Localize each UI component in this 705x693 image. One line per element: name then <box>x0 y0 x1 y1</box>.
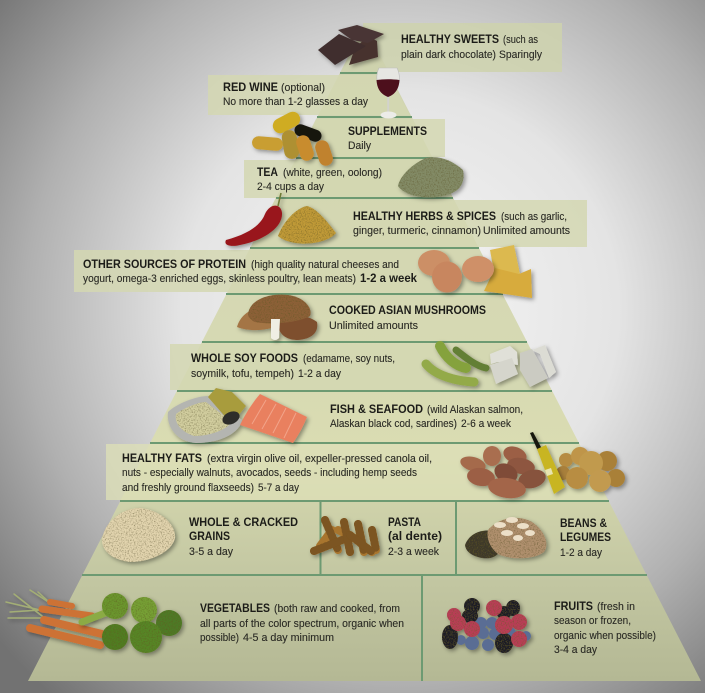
text: pasta: (al dente) <box>388 531 442 543</box>
tier: red wine <box>223 68 400 118</box>
tier: cooked asian mushrooms <box>237 295 486 340</box>
text: healthy sweets: plain dark chocolate) <box>401 49 496 61</box>
green divider lines <box>82 73 647 681</box>
icon: rice pile <box>102 508 175 562</box>
text: protein: yogurt, omega-3 enriched eggs, skinless poultry, lean meats) <box>83 273 356 285</box>
icon: broccoli <box>82 593 182 653</box>
text: tea <box>257 167 382 193</box>
icon: olive oil bottle <box>530 432 565 494</box>
text: tea: TEA <box>257 167 278 179</box>
tier: tea <box>257 157 464 197</box>
text: grains <box>189 517 298 558</box>
panel: tea <box>244 160 452 198</box>
text: vegetables: all parts of the color spectrum, organic when <box>200 618 404 630</box>
text: soy foods: 1-2 a day <box>298 368 341 380</box>
text: herbs and spices: HEALTHY HERBS & SPICES <box>353 211 496 223</box>
text: pasta <box>388 517 442 558</box>
tier: beans and legumes <box>465 517 611 559</box>
text: fruits: (fresh in <box>597 601 635 613</box>
text: healthy sweets: Sparingly <box>499 49 542 61</box>
tier: supplements <box>251 109 427 168</box>
text: herbs and spices: (such as garlic, <box>501 211 567 223</box>
text: beans and legumes <box>560 518 611 559</box>
icon: red chili pepper <box>225 193 282 246</box>
text: herbs and spices: ginger, turmeric, cinnamon) <box>353 225 481 237</box>
text: soy foods <box>191 353 395 380</box>
text: soy foods: soymilk, tofu, tempeh) <box>191 368 294 380</box>
text: grains: WHOLE & CRACKED <box>189 517 298 529</box>
tier: fish and seafood <box>168 388 523 443</box>
icon: sardine tin <box>168 388 246 443</box>
text: red wine: (optional) <box>281 82 325 94</box>
text: protein: (high quality natural cheeses and <box>251 259 399 271</box>
text: fruits: season or frozen, <box>554 615 631 627</box>
tier: healthy fats <box>122 432 625 501</box>
icon: wine glass <box>376 68 400 118</box>
icon: beans pile <box>465 517 546 558</box>
text: fruits <box>554 601 656 656</box>
text: healthy fats: 5-7 a day <box>258 482 299 494</box>
text: red wine <box>223 82 368 108</box>
text: healthy sweets <box>401 34 542 61</box>
text: soy foods: (edamame, soy nuts, <box>303 353 395 365</box>
icon: dark chocolate <box>318 25 384 65</box>
text: vegetables: possible) <box>200 632 239 644</box>
panel: soy foods <box>170 344 551 390</box>
text: fish and seafood: (wild Alaskan salmon, <box>427 404 523 416</box>
text: protein: 1-2 a week <box>360 273 418 285</box>
icon: tea leaves <box>398 157 464 197</box>
text: vegetables: VEGETABLES <box>200 603 270 615</box>
text: grains: 3-5 a day <box>189 546 233 558</box>
text: healthy fats: and freshly ground flaxseeds) <box>122 482 254 494</box>
text: pasta: 2-3 a week <box>388 546 439 558</box>
text: grains: GRAINS <box>189 531 230 543</box>
tier: healthy herbs and spices <box>225 193 570 246</box>
text: mushrooms: COOKED ASIAN MUSHROOMS <box>329 305 486 317</box>
panel: protein <box>74 250 502 292</box>
panel: red wine <box>208 75 410 115</box>
text: healthy fats <box>122 453 432 494</box>
text: beans and legumes: BEANS & <box>560 518 607 530</box>
icon: mixed berries <box>442 598 531 653</box>
text: mushrooms: Unlimited amounts <box>329 320 418 332</box>
text: protein <box>83 259 418 285</box>
text: supplements: Daily <box>348 140 371 152</box>
text: fish and seafood: Alaskan black cod, sardines) <box>330 418 457 430</box>
tier: pasta <box>314 517 442 558</box>
icon: fusilli pasta <box>314 520 376 552</box>
icon: eggs <box>418 250 494 292</box>
text: beans and legumes: LEGUMES <box>560 532 611 544</box>
icon: cheese <box>484 245 532 298</box>
text: healthy sweets: (such as <box>503 34 538 46</box>
tier: fruits <box>442 598 656 656</box>
tier: whole and cracked grains <box>102 508 298 562</box>
text: supplements: SUPPLEMENTS <box>348 126 427 138</box>
text: mushrooms <box>329 305 486 332</box>
text: pasta: PASTA <box>388 517 421 529</box>
tier: healthy sweets <box>318 25 542 65</box>
icon: edamame <box>426 346 486 382</box>
icon: carrots <box>6 590 102 645</box>
icon: spice pile <box>278 206 336 244</box>
text: vegetables: 4-5 a day minimum <box>243 632 334 644</box>
tier: vegetables <box>6 590 404 653</box>
tier: whole soy foods <box>191 345 556 387</box>
text: tea: 2-4 cups a day <box>257 181 324 193</box>
text: healthy fats: (extra virgin olive oil, expeller-pressed canola oil, <box>207 453 432 465</box>
panel: healthy sweets <box>363 23 562 72</box>
text: protein: OTHER SOURCES OF PROTEIN <box>83 259 246 271</box>
text: healthy sweets: HEALTHY SWEETS <box>401 34 499 46</box>
icon: walnuts <box>556 447 625 492</box>
text: fruits: FRUITS <box>554 601 593 613</box>
text: beans and legumes: 1-2 a day <box>560 547 602 559</box>
tier: other sources of protein <box>83 245 532 298</box>
text: fish and seafood <box>330 404 523 430</box>
text: soy foods: WHOLE SOY FOODS <box>191 353 298 365</box>
text: herbs and spices: Unlimited amounts <box>483 225 570 237</box>
panel: supplements <box>297 119 445 157</box>
text: fish and seafood: FISH & SEAFOOD <box>330 404 423 416</box>
text: red wine: RED WINE <box>223 82 278 94</box>
text: herbs and spices <box>353 211 570 237</box>
text: fruits: 3-4 a day <box>554 644 597 656</box>
panel: healthy fats <box>106 444 608 500</box>
text: supplements <box>348 126 427 152</box>
text: vegetables: (both raw and cooked, from <box>274 603 400 615</box>
text: tea: (white, green, oolong) <box>283 167 382 179</box>
panel: herbs and spices <box>252 200 587 247</box>
icon: salmon fillet <box>240 394 307 443</box>
icon: almonds <box>459 443 548 501</box>
icon: tofu cubes <box>490 345 556 387</box>
text: fish and seafood: 2-6 a week <box>461 418 511 430</box>
icon: mushrooms <box>237 295 317 340</box>
text: vegetables <box>200 603 404 644</box>
icon: capsules <box>251 109 335 168</box>
text: fruits: organic when possible) <box>554 630 656 642</box>
text: red wine: No more than 1-2 glasses a day <box>223 96 368 108</box>
text: healthy fats: nuts - especially walnuts, avocados, seeds - including hemp seeds <box>122 467 417 479</box>
text: healthy fats: HEALTHY FATS <box>122 453 202 465</box>
